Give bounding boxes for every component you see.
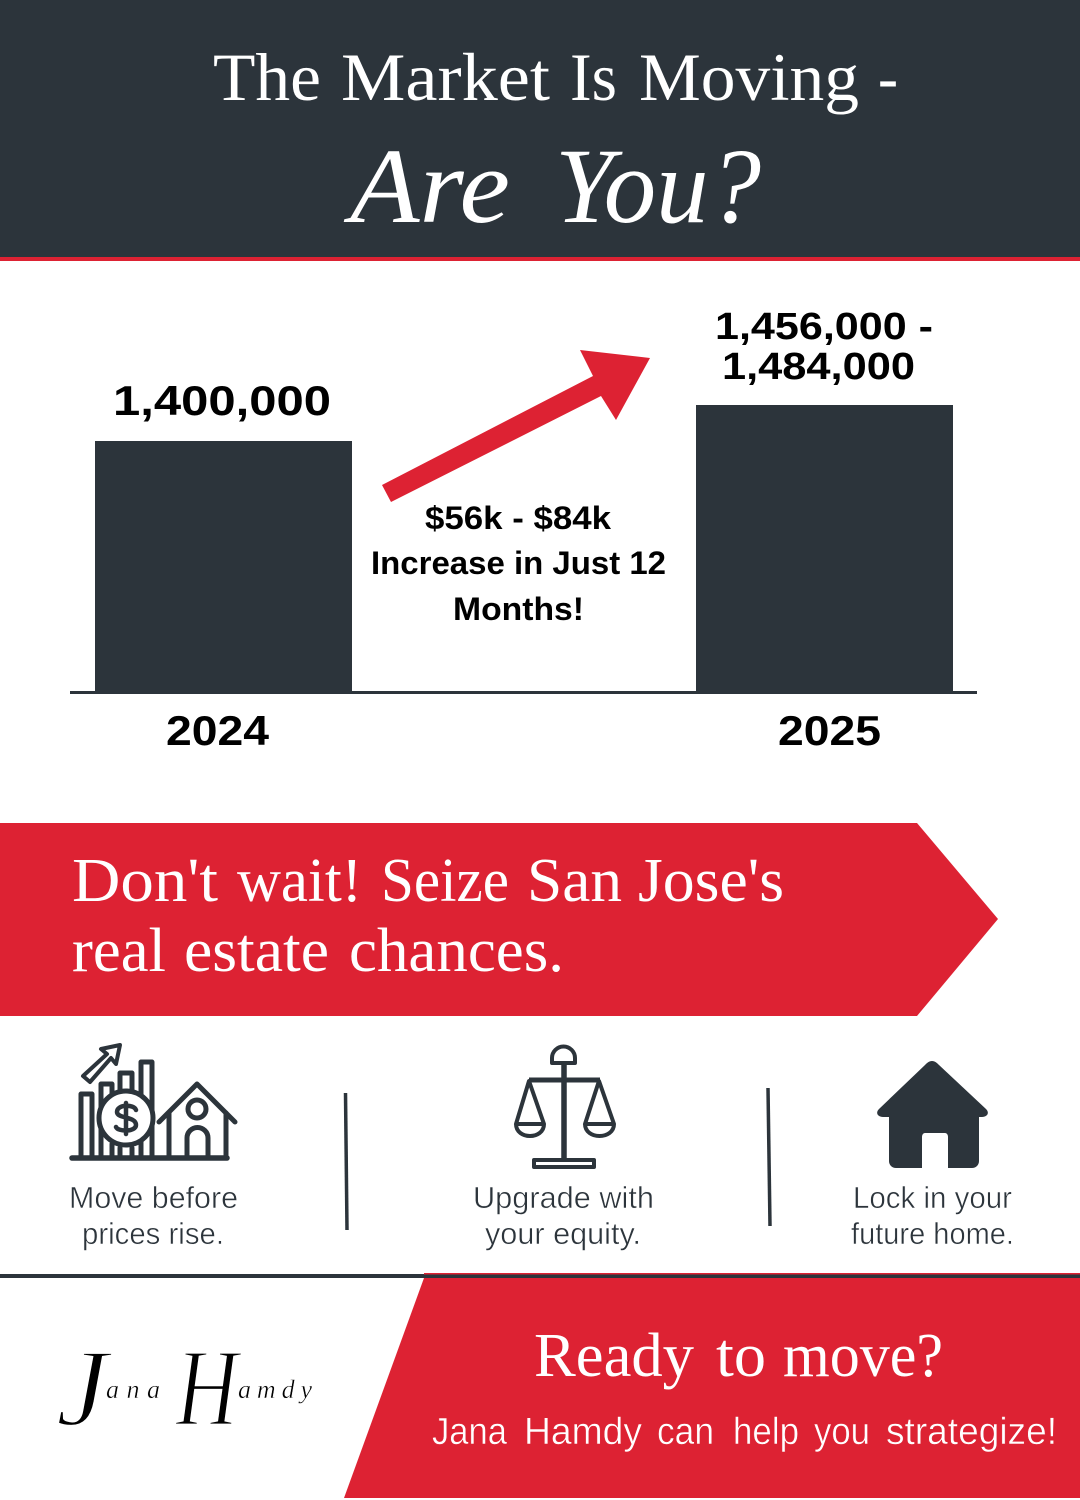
caption: move before prices rise: Move before xyxy=(69,1180,238,1215)
value label: 2024: 1,400,000 xyxy=(113,377,331,424)
divider xyxy=(0,1274,1080,1278)
divider xyxy=(768,1088,770,1226)
title: Is xyxy=(570,39,617,115)
banner: call to seize xyxy=(0,823,998,1016)
banner: call to seize: Don't xyxy=(72,847,218,915)
signature: ana xyxy=(106,1375,160,1404)
axis label: 2025: 2025 xyxy=(778,707,881,754)
panel: ready to move: you xyxy=(814,1411,870,1453)
subtitle: Are xyxy=(344,128,510,246)
signature: J xyxy=(56,1327,114,1449)
subtitle: You? xyxy=(555,128,761,246)
panel: ready to move: Jana xyxy=(432,1411,508,1453)
value label: 2025 xyxy=(715,306,933,388)
signature: amdy xyxy=(238,1375,312,1404)
icon: rising prices and house xyxy=(72,1045,235,1158)
callout: increase: Months! xyxy=(453,591,584,627)
caption: upgrade with your equity xyxy=(473,1180,654,1251)
title: - xyxy=(878,39,898,115)
axis label: 2024: 2024 xyxy=(166,707,270,754)
callout: increase: $56k - $84k xyxy=(425,500,611,536)
caption: upgrade with your equity: your equity. xyxy=(485,1216,641,1251)
panel: ready to move xyxy=(344,1273,1080,1498)
signature: H xyxy=(174,1327,242,1449)
icon: balance scale xyxy=(516,1046,614,1167)
panel: ready to move: to xyxy=(716,1322,766,1390)
value label: 2025: 1,484,000 xyxy=(722,346,915,388)
caption: move before prices rise: prices rise. xyxy=(82,1216,224,1251)
signature xyxy=(56,1327,312,1449)
caption: move before prices rise xyxy=(69,1180,238,1251)
caption: lock in your future home xyxy=(851,1180,1014,1251)
panel: ready to move: Hamdy xyxy=(524,1411,642,1453)
caption: lock in your future home: Lock in your xyxy=(853,1180,1012,1215)
banner: call to seize: Seize xyxy=(381,847,509,915)
panel: ready to move: move? xyxy=(783,1322,943,1390)
panel: ready to move: Ready xyxy=(534,1322,694,1390)
caption: upgrade with your equity: Upgrade with xyxy=(473,1180,654,1215)
chart baseline xyxy=(70,691,977,694)
title: The xyxy=(213,39,321,115)
banner: call to seize: estate xyxy=(184,917,329,985)
icon: solid house xyxy=(877,1061,988,1168)
callout: increase xyxy=(371,500,666,627)
value label: 2025: 1,456,000 - xyxy=(715,306,933,348)
callout: increase: Increase in Just 12 xyxy=(371,545,666,581)
caption: lock in your future home: future home. xyxy=(851,1216,1014,1251)
panel: ready to move: help xyxy=(733,1411,799,1453)
arrow: upward increase xyxy=(382,350,650,502)
panel: ready to move: can xyxy=(657,1411,714,1453)
banner: call to seize: chances. xyxy=(349,917,564,985)
bar: 2025 xyxy=(696,405,953,693)
panel: header xyxy=(0,0,1080,261)
banner: call to seize: wait! xyxy=(237,847,362,915)
banner: call to seize: real xyxy=(72,917,166,985)
banner: call to seize: Jose's xyxy=(638,847,784,915)
title xyxy=(213,39,898,115)
title: Moving xyxy=(639,39,859,115)
bar: 2024 xyxy=(95,441,352,693)
divider xyxy=(346,1093,347,1230)
bar chart xyxy=(70,306,977,754)
title: Market xyxy=(341,39,550,115)
banner: call to seize: San xyxy=(527,847,622,915)
panel: ready to move: strategize! xyxy=(886,1411,1057,1453)
subtitle xyxy=(344,128,761,246)
